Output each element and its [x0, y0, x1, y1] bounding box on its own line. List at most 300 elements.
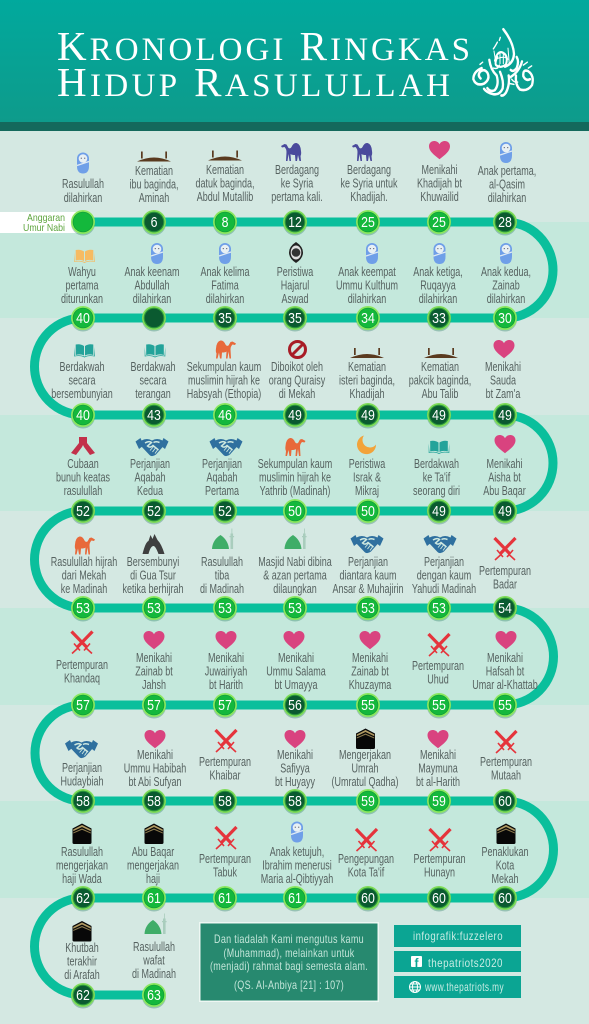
icon: facebook: f — [414, 956, 420, 970]
icon: heart — [216, 631, 236, 649]
text: Fatima — [211, 279, 240, 293]
text: Umrah — [352, 762, 378, 776]
text: haji Wada — [62, 873, 103, 886]
event: Berdakwah secara terangan — [131, 344, 175, 428]
event: Kematian ibu baginda — [130, 152, 178, 236]
text: Menikahi — [137, 749, 173, 762]
text: Anak ketujuh, — [270, 846, 324, 859]
age node 57: 57 — [147, 697, 161, 713]
age node 55: 55 — [432, 697, 446, 713]
text — [336, 266, 398, 306]
panel: quran quote: (Muhammad), melainkan untuk — [224, 946, 355, 960]
age node 62: 62 — [76, 890, 90, 906]
icon: bed — [208, 150, 242, 160]
age node 62: 62 — [76, 987, 90, 1003]
text: Jahsh — [142, 679, 166, 692]
text: Maria al-Qibtiyyah — [261, 873, 333, 886]
text: bt al-Harith — [416, 776, 460, 789]
text: Rasulullah — [201, 556, 243, 569]
text — [56, 659, 108, 686]
event: Bersembunyi di Gua Tsur — [123, 534, 183, 622]
icon: bed — [424, 348, 458, 358]
text: Aqabah — [207, 471, 237, 485]
text — [202, 458, 242, 498]
text: Kematian — [206, 164, 244, 177]
text — [127, 846, 179, 886]
text: mengerjakan — [127, 859, 179, 873]
text: Abdul Mutallib — [197, 191, 253, 204]
header banner — [0, 0, 589, 131]
text: Uhud — [427, 673, 449, 687]
text — [478, 165, 536, 205]
text: mengerjakan — [56, 859, 108, 873]
text: Kota Ta'if — [348, 866, 385, 880]
event: Menikahi Safiyya — [275, 730, 315, 814]
text: Aswad — [282, 293, 308, 306]
icon: mosque — [144, 914, 167, 934]
age node 60: 60 — [361, 890, 375, 906]
text: Khutbah — [65, 942, 99, 955]
icon: handshake — [136, 438, 168, 456]
text: Menikahi — [422, 164, 457, 177]
text: diantara kaum — [340, 569, 396, 583]
text: Israk & — [353, 471, 382, 485]
panel: facebook — [394, 951, 521, 972]
event: Menikahi Khadijah — [417, 141, 462, 236]
age node 40: 40 — [76, 407, 90, 423]
icon: handshake — [350, 535, 384, 553]
text — [482, 846, 528, 886]
icon: crescent — [357, 436, 376, 454]
text: Menikahi — [487, 652, 523, 665]
age node 61: 61 — [147, 890, 161, 906]
age node 52: 52 — [147, 503, 161, 519]
text: Aminah — [139, 192, 169, 205]
text: Pertempuran — [479, 565, 531, 578]
text: Abdullah — [135, 279, 169, 293]
icon: heart — [494, 340, 514, 358]
text — [409, 361, 471, 401]
text: Pertempuran — [56, 659, 108, 672]
age node 53: 53 — [76, 600, 90, 616]
age node 59: 59 — [432, 793, 446, 809]
text: Perjanjian — [202, 458, 242, 471]
age node 53: 53 — [361, 600, 375, 616]
text: seorang diri — [413, 485, 460, 498]
text: al-Qasim — [489, 178, 525, 192]
text: Khandaq — [64, 672, 100, 686]
text: bersembunyian — [51, 388, 113, 401]
text: orang Quraisy — [269, 374, 326, 388]
age node 49: 49 — [432, 503, 446, 519]
event: Pertempuran Uhud — [412, 634, 464, 718]
text: ke Syria — [281, 177, 314, 191]
age node 49: 49 — [361, 407, 375, 423]
icon: handshake — [424, 535, 456, 553]
age node 50: 50 — [288, 503, 302, 519]
text: ke Ta'if — [423, 471, 451, 485]
text: Berdakwah — [131, 361, 175, 374]
icon: baby — [219, 243, 231, 264]
label: Anggaran Umur Nabi — [0, 212, 78, 234]
event: Kematian pakcik baginda — [409, 348, 471, 428]
text: Rasulullah — [133, 941, 175, 954]
age node 59: 59 — [361, 793, 375, 809]
age node 49: 49 — [288, 407, 302, 423]
age node 28: 28 — [498, 214, 512, 230]
panel: quran quote: (menjadi) rahmat bagi semesta alam. — [210, 959, 368, 973]
text: Anak keempat — [338, 266, 396, 279]
text — [51, 361, 113, 401]
event: Pertempuran Badar — [479, 538, 531, 622]
age node 35: 35 — [288, 310, 302, 326]
text — [124, 749, 186, 789]
icon: globe — [410, 982, 420, 992]
text: Diboikot oleh — [271, 361, 323, 374]
text — [266, 652, 326, 692]
event: Menikahi Aisha — [483, 435, 526, 524]
text: Khadijah bt — [417, 177, 462, 191]
age node 58: 58 — [147, 793, 161, 809]
event: Mengerjakan Umrah — [332, 728, 398, 814]
age node 54: 54 — [498, 600, 512, 616]
text: terakhir — [67, 955, 97, 969]
text: Hafsah bt — [486, 665, 524, 679]
icon: bed — [350, 348, 384, 358]
event: Masjid Nabi dibina — [258, 528, 332, 622]
text — [479, 565, 531, 592]
text: Penaklukan — [482, 846, 528, 859]
text: pakcik baginda, — [409, 374, 471, 388]
age node 25: 25 — [432, 214, 446, 230]
event: Perjanjian Aqabah Pertama — [202, 438, 242, 524]
text — [205, 652, 247, 692]
icon: baby — [500, 142, 512, 163]
event: Rasulullah tiba di Madinah — [200, 528, 244, 622]
event: Anak ketiga Ruqayya — [413, 243, 463, 332]
text: Pertempuran — [199, 756, 251, 769]
age node 35: 35 — [218, 310, 232, 326]
event: Wahyu pertama — [61, 250, 103, 332]
text: secara — [140, 374, 167, 388]
text: Menikahi — [277, 749, 313, 762]
text: Anak pertama, — [478, 165, 536, 178]
icon: heart — [284, 730, 306, 748]
text: di Arafah — [64, 969, 100, 982]
text: bt Abi Sufyan — [129, 776, 181, 789]
text — [199, 756, 251, 783]
icon: camel — [352, 143, 372, 161]
text — [349, 652, 392, 692]
age node 58: 58 — [218, 793, 232, 809]
text: bt Zam'a — [486, 388, 521, 401]
text — [56, 846, 108, 886]
title: KRONOLOGI RINGKAS — [57, 23, 470, 69]
icon: baby — [366, 243, 378, 264]
icon: heart — [144, 631, 164, 649]
text: di Mekah — [279, 388, 315, 401]
icon: mosque — [284, 528, 307, 549]
text: & azan pertama — [263, 569, 328, 583]
icon: handshake — [210, 438, 242, 456]
text — [483, 458, 526, 498]
event: Rasulullah dilahirkan — [62, 152, 104, 236]
event: Menikahi Juwairiyah — [205, 631, 247, 718]
event: Perjanjian Ansar & Muhajirin — [333, 535, 403, 622]
age node 43: 43 — [147, 407, 161, 423]
text: Menikahi — [136, 652, 172, 665]
text: Ibrahim menerusi — [262, 859, 332, 873]
text: Menikahi — [420, 749, 456, 762]
text: ke Syria untuk — [341, 177, 398, 191]
text: di Madinah — [200, 583, 244, 596]
text: ketika berhijrah — [123, 583, 183, 596]
event: Pertempuran Mutaah — [480, 731, 532, 814]
event: Anak keempat Ummu Kulthum — [336, 243, 398, 332]
event: Perjanjian Yahudi Madinah — [412, 535, 476, 622]
text: Hudaybiah — [61, 775, 103, 789]
icon: swords — [496, 731, 516, 753]
event: Hijrah ke Yathrib — [258, 438, 332, 524]
text: Menikahi — [278, 652, 314, 665]
event: Menikahi Zainab bt Jahsh — [135, 631, 173, 718]
text: Menikahi — [487, 458, 522, 471]
event: Anak kedua Zainab — [481, 243, 531, 332]
text: Tabuk — [213, 866, 237, 880]
text: Kematian — [135, 165, 173, 178]
text — [201, 266, 250, 306]
text — [199, 853, 251, 880]
icon: prohibited — [290, 342, 306, 358]
text — [472, 652, 538, 692]
text: Masjid Nabi dibina — [258, 556, 332, 569]
text — [416, 749, 460, 789]
age node 56: 56 — [288, 697, 302, 713]
icon: baby — [151, 243, 163, 264]
text: isteri baginda, — [339, 374, 395, 388]
icon: baby — [434, 243, 446, 264]
text: Badar — [493, 578, 517, 592]
text: Kematian — [348, 361, 386, 374]
icon: camel — [216, 340, 236, 358]
text — [413, 458, 460, 498]
text: dilahirkan — [348, 293, 386, 306]
age node 61: 61 — [218, 890, 232, 906]
icon: swords — [72, 632, 92, 654]
text — [200, 556, 244, 596]
event: Cubaan bunuh — [56, 437, 110, 524]
text: Pengepungan — [338, 853, 394, 866]
age node 6: 6 — [151, 214, 157, 230]
text — [258, 458, 332, 498]
text — [417, 164, 462, 204]
event: Pertempuran Tabuk — [199, 827, 251, 912]
text: pertama kali. — [271, 191, 323, 204]
text: dilaungkan — [273, 583, 317, 596]
panel: credit — [394, 925, 521, 947]
text: Safiyya — [280, 762, 311, 776]
text: Khadijah — [350, 388, 384, 401]
age node 49: 49 — [498, 407, 512, 423]
text: bunuh keatas — [56, 471, 110, 485]
text: dilahirkan — [133, 293, 171, 306]
panel: website — [394, 976, 521, 998]
age node 30: 30 — [498, 310, 512, 326]
event: Menikahi Sauda — [485, 340, 521, 428]
event: Anak keenam Abdullah — [125, 243, 179, 332]
icon: heart — [429, 141, 450, 159]
age node 57: 57 — [218, 697, 232, 713]
text — [413, 266, 463, 306]
text — [338, 853, 394, 880]
age node 8: 8 — [222, 214, 228, 230]
text: di Madinah — [132, 968, 176, 981]
event: Anak ketujuh Ibrahim — [261, 822, 333, 912]
event: Menikahi Maymuna — [416, 730, 460, 814]
text: Anak kedua, — [481, 266, 531, 279]
age node 46: 46 — [218, 407, 232, 423]
icon: swords — [356, 829, 377, 851]
text: Sekumpulan kaum — [258, 458, 332, 471]
text: Khuzayma — [349, 679, 392, 692]
text: Perjanjian — [130, 458, 170, 471]
icon: handshake — [65, 740, 98, 758]
text: (Umratul Qadha) — [332, 776, 398, 789]
text — [341, 164, 398, 204]
event: Diboikot oleh orang Quraisy — [269, 342, 326, 428]
panel: credit: infografik:fuzzelero — [413, 929, 503, 943]
text — [349, 458, 386, 498]
text: Mekah — [492, 873, 518, 886]
text: Hajarul — [281, 279, 309, 293]
text: Perjanjian — [62, 762, 102, 775]
event: Pertempuran Hunayn — [414, 829, 465, 912]
age node 52: 52 — [218, 503, 232, 519]
text: dilahirkan — [64, 192, 102, 205]
text — [125, 266, 179, 306]
icon: kaaba — [496, 824, 516, 844]
text — [333, 556, 403, 596]
text: Mengerjakan — [339, 749, 391, 762]
text: Anak keenam — [125, 266, 179, 279]
age node 63: 63 — [147, 987, 161, 1003]
age node 55: 55 — [498, 697, 512, 713]
text — [271, 164, 323, 204]
event: Anak kelima Fatima — [201, 243, 250, 332]
text — [269, 361, 326, 401]
text: Abu Talib — [422, 388, 458, 401]
text — [51, 556, 117, 596]
text — [132, 941, 176, 981]
text — [61, 762, 103, 789]
text: Abu Baqar — [483, 485, 526, 498]
text: Abu Baqar — [132, 846, 175, 859]
event: Abu Baqar haji — [127, 824, 179, 912]
text: diturunkan — [61, 293, 103, 306]
icon: baby — [77, 152, 89, 174]
icon: swords — [430, 829, 450, 851]
event: Rasulullah hijrah — [51, 536, 117, 622]
timeline track — [34, 222, 554, 995]
text: rasulullah — [64, 485, 102, 498]
text — [64, 942, 100, 982]
icon: heart — [428, 730, 448, 748]
age node: start — [71, 210, 95, 236]
event: Khutbah terakhir — [64, 921, 100, 1008]
text: Anak ketiga, — [413, 266, 463, 279]
event: Menikahi Hafsah — [472, 631, 538, 718]
text — [275, 749, 315, 789]
text: Habsyah (Ethopia) — [187, 388, 261, 401]
icon: swords — [216, 827, 236, 849]
text: Berdakwah — [60, 361, 104, 374]
age node 34: 34 — [361, 310, 375, 326]
icon: kaaba — [72, 824, 92, 844]
text: dilahirkan — [487, 293, 525, 306]
text: Pertempuran — [412, 660, 464, 673]
panel: quran quote — [200, 923, 378, 1001]
icon: book — [74, 250, 95, 263]
event: Menikahi Ummu Salama — [266, 631, 326, 718]
text: Pertama — [205, 485, 240, 498]
text: Menikahi — [485, 361, 521, 374]
text: Menikahi — [208, 652, 244, 665]
text: Kedua — [137, 485, 164, 498]
event: Kematian isteri baginda — [339, 348, 395, 428]
event: Rasulullah wafat — [132, 914, 176, 1008]
text: Sauda — [490, 374, 517, 388]
text: dilahirkan — [419, 293, 457, 306]
text — [187, 361, 261, 401]
text — [196, 164, 254, 204]
text: Zainab — [492, 279, 520, 293]
event: Menikahi Ummu Habibah — [124, 730, 186, 814]
event: Perjanjian Hudaybiah — [61, 740, 103, 814]
icon: heart — [494, 435, 516, 453]
event: Perjanjian Aqabah Kedua — [130, 438, 170, 524]
text — [130, 458, 170, 498]
text: Khuwailid — [420, 191, 459, 204]
text: dilahirkan — [206, 293, 244, 306]
text: Kematian — [421, 361, 459, 374]
text: Ruqayya — [420, 279, 457, 293]
text: wafat — [142, 954, 165, 968]
text: datuk baginda, — [196, 177, 254, 191]
text — [412, 660, 464, 687]
text: Anak kelima — [201, 266, 250, 279]
age node 25: 25 — [361, 214, 375, 230]
age node 49: 49 — [432, 407, 446, 423]
age node 58: 58 — [288, 793, 302, 809]
text: Juwairiyah — [205, 665, 247, 679]
text: Pertempuran — [199, 853, 251, 866]
text — [480, 756, 532, 783]
text: ibu baginda, — [130, 178, 178, 192]
text: Perjanjian — [348, 556, 388, 569]
text — [277, 266, 314, 306]
text: Yahudi Madinah — [412, 583, 476, 596]
icon: kaaba — [144, 824, 164, 844]
event: Berdakwah ke Ta'if — [413, 441, 460, 524]
event: Penaklukan Kota Mekah — [482, 824, 528, 912]
text: Berdakwah — [414, 458, 459, 471]
text: Perjanjian — [424, 556, 464, 569]
text: haji — [146, 873, 160, 886]
text — [62, 178, 104, 205]
age node 40: 40 — [76, 310, 90, 326]
icon: black stone — [289, 242, 303, 263]
label: Anggaran Umur Nabi: Anggaran — [27, 212, 65, 224]
